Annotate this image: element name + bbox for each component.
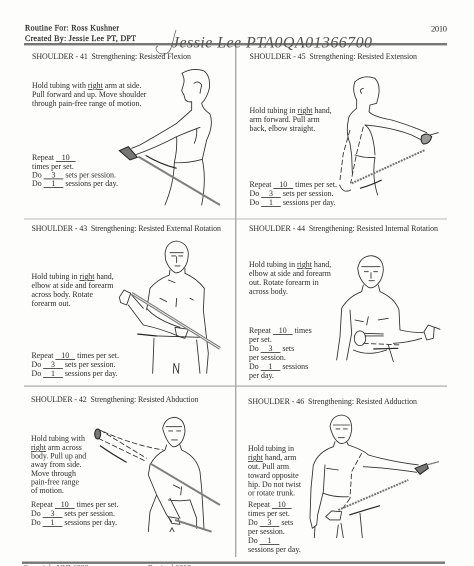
dosage: Do 3 sets: [249, 344, 294, 353]
dosage: Do 3 sets: [248, 518, 293, 527]
dosage: times per set.: [248, 509, 290, 518]
instructions: Hold tubing with: [31, 434, 85, 443]
dosage: Do 1 sessions per day.: [32, 179, 118, 188]
panel: shoulder 43 resisted external rotation: [32, 224, 221, 378]
dosage: Repeat 10 times per set.: [31, 500, 118, 509]
header: routine details: Routine For: Ross Kushner: [25, 24, 119, 32]
instructions: hip. Do not twist: [248, 480, 302, 489]
dosage: per set.: [249, 335, 272, 344]
panel: shoulder 45 resisted extension: [250, 52, 438, 207]
instructions: forearm out.: [32, 299, 71, 308]
dosage: Do 1 sessions per day.: [250, 198, 336, 207]
instructions: toward opposite: [248, 471, 299, 480]
dosage: Do 1: [248, 536, 271, 545]
instructions: Hold tubing in right hand,: [32, 272, 114, 281]
instructions: elbow at side and forearm: [249, 269, 332, 278]
panel: shoulder 42 resisted abduction: [31, 395, 220, 532]
instructions: Hold tubing with right arm at side.: [32, 81, 141, 90]
heading: SHOULDER - 46 Strengthening: Resisted Adduction: [248, 397, 417, 406]
instructions: of motion.: [31, 486, 64, 495]
heading: SHOULDER - 45 Strengthening: Resisted Extension: [250, 52, 417, 61]
handwritten signature: [156, 30, 372, 54]
dosage: Repeat 10: [248, 500, 286, 509]
dosage: Repeat 10 times per set.: [250, 180, 337, 189]
dosage: per session.: [248, 527, 285, 536]
instructions: Hold tubing in right hand,: [250, 106, 332, 115]
instructions: arm forward. Pull arm: [250, 115, 320, 124]
instructions: pain-free range: [31, 478, 79, 486]
instructions: out. Pull arm: [248, 462, 290, 471]
instructions: Hold tubing in right hand,: [249, 260, 331, 269]
footer: copyright text: [23, 564, 191, 566]
dosage: Do 1 sessions: [249, 362, 308, 371]
heading: SHOULDER - 41 Strengthening: Resisted Flexion: [32, 52, 191, 61]
instructions: through pain-free range of motion.: [32, 99, 141, 108]
instructions: or rotate trunk.: [248, 488, 295, 498]
instructions: back, elbow straight.: [250, 124, 315, 133]
instructions: Hold tubing in: [248, 444, 294, 453]
dosage: sessions per day.: [248, 545, 301, 554]
figure: side view, arm pulled back: [340, 77, 438, 195]
instructions: across body.: [249, 287, 288, 296]
dosage: times per set.: [32, 162, 74, 171]
dosage: Do 3 sets per session.: [31, 509, 115, 518]
instructions: Pull forward and up. Move shoulder: [32, 90, 147, 99]
dosage: Repeat 10: [32, 153, 70, 162]
year: 2010: [431, 24, 447, 34]
instructions: Move through: [31, 469, 76, 478]
instructions: out. Rotate forearm in: [249, 278, 319, 287]
figure: front view, arm pulled across body: [310, 415, 439, 538]
heading: SHOULDER - 44 Strengthening: Resisted Internal Rotation: [249, 224, 438, 233]
dosage: Do 3 sets per session.: [32, 360, 115, 369]
dosage: Repeat 10 times: [249, 326, 312, 335]
header: routine details: [25, 24, 136, 43]
header: routine details: Created By: Jessie Lee PT, DPT: [25, 34, 136, 43]
dosage: Do 1 sessions per day.: [32, 369, 118, 378]
instructions: right arm across: [31, 443, 82, 452]
dosage: Repeat 10 times per set.: [32, 351, 119, 360]
dosage: per day.: [249, 371, 274, 380]
figure: front view, forearm rotated out: [119, 241, 220, 373]
instructions: body. Pull up and: [31, 452, 86, 460]
panel: shoulder 44 resisted internal rotation: [249, 224, 440, 380]
figure: front view, forearm rotated in: [337, 256, 440, 362]
instructions: right hand, arm: [248, 453, 296, 462]
instructions: across body. Rotate: [32, 290, 94, 299]
panel: shoulder 46 resisted adduction: [248, 397, 439, 554]
instructions: elbow at side and forearm: [32, 281, 114, 290]
handwritten signature: Jessie Lee PTA0QA01366700: [172, 34, 372, 52]
instructions: away from side.: [31, 460, 82, 469]
dosage: per session.: [249, 353, 286, 362]
panel: shoulder 41 resisted flexion: [32, 52, 220, 205]
heading: SHOULDER - 42 Strengthening: Resisted Abduction: [31, 395, 199, 404]
figure: front view, arm pulled up and out: [95, 417, 220, 532]
dosage: Do 1 sessions per day.: [31, 518, 117, 527]
dosage: Do 3 sets per session.: [250, 189, 333, 198]
figure: side view, arm forward with tubing: [119, 69, 220, 205]
heading: SHOULDER - 43 Strengthening: Resisted External Rotation: [32, 224, 221, 233]
dosage: Do 3 sets per session.: [32, 170, 116, 180]
